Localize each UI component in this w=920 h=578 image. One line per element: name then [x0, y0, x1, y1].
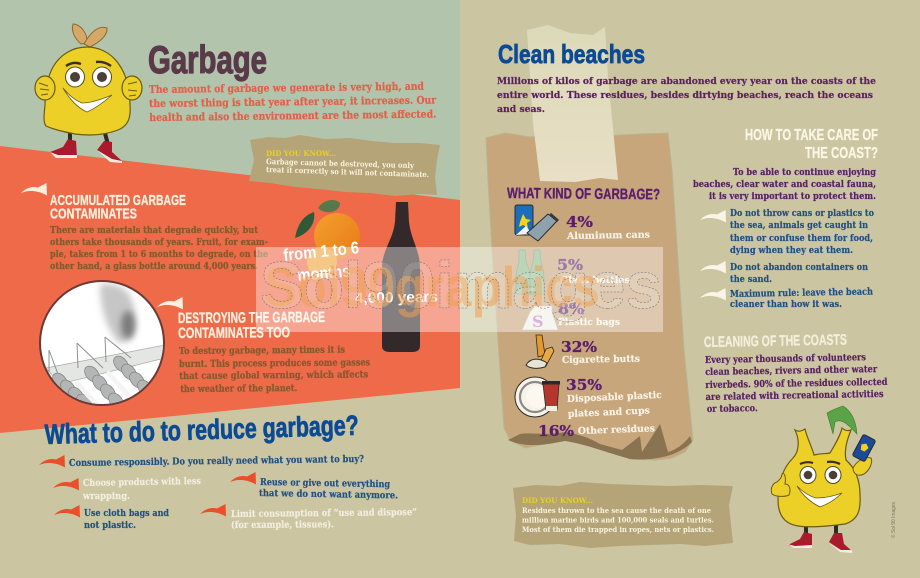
tip: do not abandon: Do not abandon containers on	[730, 262, 868, 273]
intro text: The amount of garbage we generate is very high, and	[149, 81, 425, 96]
stat: 8% plastic bags	[558, 300, 620, 328]
text: accumulated garbage body	[50, 225, 268, 272]
tip: maximum rule: cleaner than how it was.	[730, 299, 842, 310]
text: accumulated garbage body: There are materials that degrade quickly, but	[50, 225, 259, 236]
image: bottle	[382, 202, 420, 352]
text: cleaning of the coasts body	[705, 352, 888, 415]
arrow: tip 2	[53, 478, 79, 490]
arrow: coast tip 2	[700, 261, 726, 274]
watermark: Sol90images	[260, 248, 662, 322]
text: how to take care intro: it is very important to protect them.	[709, 191, 876, 202]
stat: 8% plastic bags: Plastic bags	[558, 317, 620, 328]
tip: reuse: Reuse or give out everything	[260, 477, 390, 490]
tip: maximum rule	[730, 287, 873, 310]
stat: 35% disposable plates: plates and cups	[568, 405, 650, 420]
callout: did you know 2: Residues thrown to the sea cause the death of one	[522, 506, 711, 515]
text: destroying body: the weather of the planet.	[180, 383, 297, 395]
arrow: coast tip 3	[700, 288, 726, 300]
text: accumulated garbage body: others take thousands of years. Fruit, for exam-	[50, 237, 268, 248]
stat: 35% disposable plates: 35%	[566, 376, 602, 394]
torn edge of cardboard	[508, 424, 692, 459]
tip: consume responsibly: Consume responsibly. Do you really need what you want to buy?	[69, 454, 364, 469]
heading: how to take care	[745, 127, 878, 162]
text: how to take care intro	[693, 167, 876, 202]
heading: destroying the garbage: CONTAMINATES TOO	[178, 324, 290, 342]
icon: cigarette butts	[526, 335, 554, 368]
watermark: Sol90graphics	[264, 255, 600, 318]
stat: 32% cigarette butts	[561, 338, 640, 366]
stat: 4% aluminum cans: Aluminum cans	[566, 230, 650, 242]
stat: 8% plastic bags: 8%	[558, 300, 584, 318]
callout: did you know 1: DID YOU KNOW...	[266, 149, 336, 158]
text: cleaning of the coasts body: Every year thousands of volunteers	[705, 352, 866, 366]
heading: what kind of garbage: WHAT KIND OF GARBAGE?	[507, 185, 660, 203]
text: how to take care intro: To be able to continue enjoying	[733, 167, 876, 178]
list: reduce garbage tips	[39, 454, 417, 531]
callout: did you know 2: DID YOU KNOW...	[522, 496, 593, 505]
intro text: the worst thing is that year after year, it increases. Our	[149, 94, 437, 110]
label: fruit time: from 1 to 6	[282, 238, 360, 265]
text: destroying body: burnt. This process produces some gasses	[179, 357, 370, 370]
arrow: tip 5	[200, 504, 226, 516]
callout: did you know 1	[249, 135, 440, 196]
text: accumulated garbage body: other hand, a glass bottle around 4,000 years.	[50, 261, 258, 272]
icon: aluminium cans	[515, 205, 558, 241]
heading: destroying the garbage	[178, 309, 325, 342]
image: orange	[295, 200, 360, 277]
heading: cleaning of the coasts: CLEANING OF THE COASTS	[704, 332, 847, 351]
text: cleaning of the coasts body: are related with recreational activities	[706, 389, 884, 403]
tip: choose products: Choose products with less	[83, 476, 201, 489]
tip: cloth bags	[84, 508, 169, 531]
text: destroying body	[179, 344, 370, 395]
callout: did you know 2: million marine birds and 100,000 seals and turtles.	[522, 516, 714, 524]
tip: reuse: that we do not want anymore.	[259, 488, 398, 501]
text: clean beaches intro: and seas.	[497, 104, 545, 115]
heading: accumulated garbage: ACCUMULATED GARBAGE	[50, 192, 186, 209]
mascot: garbage bag with fists	[35, 24, 142, 163]
text: cleaning of the coasts body: or tobacco.	[707, 403, 758, 415]
arrow: tip 1	[39, 455, 65, 468]
label: fruit time: months	[297, 261, 351, 285]
tip: do not throw	[730, 208, 874, 256]
callout: did you know 2: Most of them die trapped in ropes, nets or plastics.	[522, 525, 714, 534]
label: bottle time: 4,000 years	[355, 289, 438, 307]
icon: plastic bag	[522, 306, 558, 331]
arrow: tip 3	[54, 505, 80, 518]
arrow: coast tip 1	[700, 210, 726, 222]
intro text	[149, 80, 437, 124]
tip: do not abandon	[730, 262, 868, 285]
title: Garbage: Garbage	[148, 39, 267, 82]
stat: 32% cigarette butts: Cigarette butts	[562, 354, 640, 366]
tape	[527, 25, 618, 182]
heading: how to take care: THE COAST?	[805, 145, 878, 162]
text: cleaning of the coasts body: riverbeds. 90% of the residues collected	[705, 377, 888, 391]
label: fruit time	[282, 238, 360, 285]
mascot: garbage bag with can	[771, 428, 876, 553]
tip: maximum rule: Maximum rule: leave the beach	[730, 287, 873, 300]
icon: glass bottles	[516, 250, 544, 294]
background: khaki lower left	[0, 380, 460, 578]
stat: 5% glass bottles: 5%	[557, 256, 583, 274]
heading: what to do to reduce garbage: What to do to reduce garbage?	[44, 410, 359, 450]
callout: did you know 1: treat it correctly so it will not contaminate.	[266, 165, 429, 179]
text: destroying body: that cause global warning, which affects	[179, 369, 368, 382]
arrow: tip 4	[230, 472, 256, 484]
arrow: section 1	[21, 183, 47, 196]
tip: do not throw: Do not throw cans or plastics to	[730, 208, 874, 219]
tip: do not abandon: the sand.	[730, 274, 772, 285]
credit: © Sol 90 Images	[890, 502, 897, 538]
arrow: section 2	[157, 297, 183, 310]
background: sage top left	[0, 0, 460, 210]
tip: choose products	[82, 476, 201, 502]
tip: reuse	[259, 477, 398, 501]
orange diagonal band	[0, 146, 460, 433]
tip: limit consumption: Limit consumption of “use and dispose”	[231, 507, 417, 520]
tip: limit consumption: (for example, tissues).	[231, 519, 334, 531]
stat: 4% aluminum cans: 4%	[566, 213, 593, 231]
stat: 32% cigarette butts: 32%	[561, 338, 597, 356]
stat: 35% disposable plates	[566, 376, 662, 420]
tip: do not throw: them or confuse them for food,	[730, 233, 873, 244]
text: clean beaches intro	[497, 76, 876, 115]
stat: 5% glass bottles: Glass bottles	[560, 275, 630, 286]
heading: accumulated garbage	[50, 192, 186, 222]
stat: 4% aluminum cans	[566, 213, 650, 242]
tip: cloth bags: not plastic.	[84, 520, 136, 531]
callout: did you know 2	[513, 482, 733, 548]
text: how to take care intro: beaches, clear water and coastal fauna,	[693, 179, 876, 190]
stat: 16% other residues: Other residues	[578, 423, 655, 437]
text: destroying body: To destroy garbage, many times it is	[179, 345, 345, 357]
tip: do not throw: the sea, animals get caught in	[730, 220, 868, 231]
callout: did you know 1: Garbage cannot be destroyed, you only	[266, 157, 415, 170]
icon: green recycle arrow	[827, 406, 857, 434]
text: clean beaches intro: entire world. These residues, besides dirtying beaches, reach the oceans	[497, 90, 873, 101]
stat: 5% glass bottles	[557, 256, 630, 286]
tip: do not throw: dying when they eat them.	[730, 245, 853, 256]
tip: limit consumption	[231, 507, 417, 531]
text: accumulated garbage body: ple, takes from 1 to 6 months to degrade, on the	[50, 249, 268, 260]
background: right page	[460, 0, 920, 578]
heading: destroying the garbage: DESTROYING THE GARBAGE	[178, 309, 325, 327]
tip: choose products: wrapping.	[82, 491, 130, 502]
stat: 16% other residues	[538, 422, 655, 440]
icon: plastic bag: S	[532, 312, 544, 331]
stat: 35% disposable plates: Disposable plastic	[567, 390, 662, 405]
text: cleaning of the coasts body: clean beaches, rivers and other water	[705, 364, 878, 378]
title: Clean beaches: Clean beaches	[498, 39, 645, 69]
stat: 16% other residues: 16%	[538, 422, 574, 440]
tip: cloth bags: Use cloth bags and	[84, 508, 169, 519]
intro text: health and also the environment are the most affected.	[149, 108, 436, 124]
heading: accumulated garbage: CONTAMINATES	[50, 206, 137, 222]
icon: plates and cup	[515, 377, 560, 417]
text: clean beaches intro: Millions of kilos of garbage are abandoned every year on the coasts of the	[497, 76, 876, 87]
panel: cardboard	[486, 133, 693, 460]
image: incinerator in circle	[40, 281, 165, 413]
